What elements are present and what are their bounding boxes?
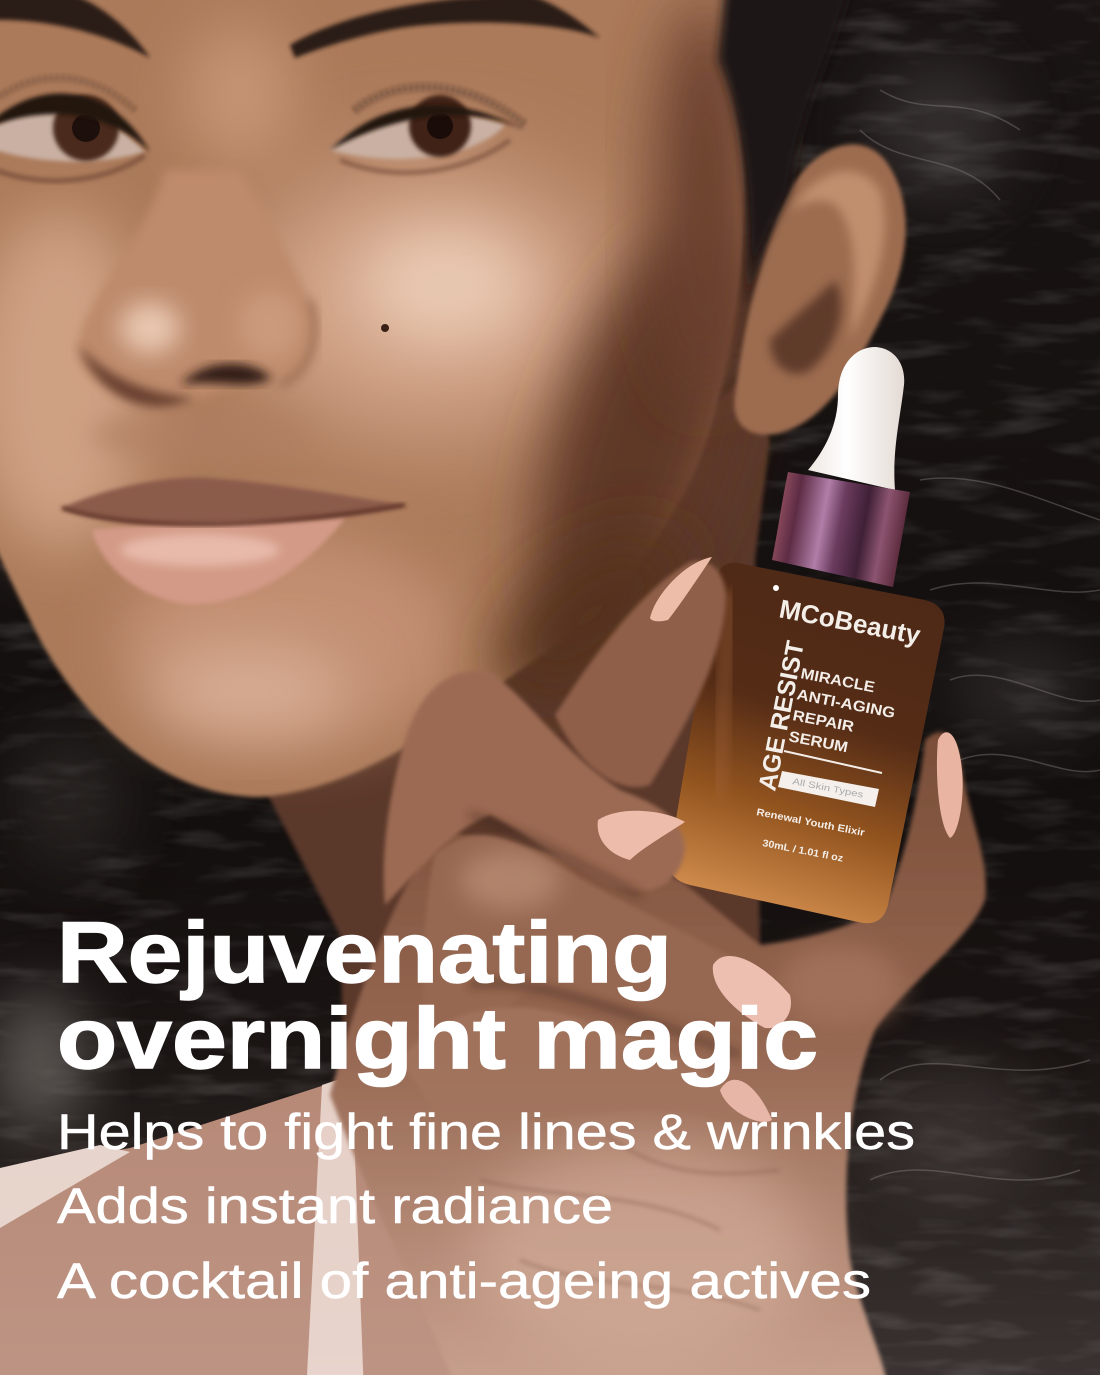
metal collar bbox=[772, 472, 910, 587]
neck bbox=[255, 380, 770, 1100]
benefits list: Adds instant radiance bbox=[57, 1178, 613, 1234]
serum bottle bbox=[669, 563, 945, 923]
eye left bbox=[0, 78, 150, 181]
benefits list: Helps to fight fine lines & wrinkles bbox=[57, 1104, 915, 1160]
nail: index bbox=[598, 811, 685, 860]
lips bbox=[62, 478, 405, 604]
lower wash bbox=[0, 1050, 1100, 1375]
label text on bottle: REPAIR bbox=[791, 707, 856, 736]
fingers bbox=[384, 557, 963, 1128]
benefits list bbox=[57, 1104, 915, 1309]
finger shadows bbox=[470, 815, 740, 1055]
face bbox=[0, 0, 789, 797]
nail: right bbox=[937, 732, 963, 838]
eye right bbox=[330, 87, 525, 173]
upper finger bbox=[555, 561, 726, 787]
benefits list: A cocktail of anti-ageing actives bbox=[57, 1253, 871, 1309]
label text on bottle: All Skin Types bbox=[792, 776, 865, 800]
index finger bbox=[384, 671, 685, 905]
nose bbox=[78, 170, 315, 408]
nail: top bbox=[650, 557, 712, 621]
hair strands at temple bbox=[718, 0, 850, 320]
nail: lower bbox=[713, 956, 791, 1028]
dropper bulb bbox=[808, 347, 904, 490]
nail: bottom bbox=[720, 1080, 772, 1122]
third finger bbox=[423, 835, 791, 1090]
chest and straps bbox=[0, 1075, 480, 1375]
label text on bottle: 30mL / 1.01 fl oz bbox=[761, 838, 844, 865]
hand palm bbox=[330, 732, 986, 1375]
headline bbox=[57, 905, 818, 1087]
headline: overnight magic bbox=[57, 991, 818, 1087]
label text on bottle: SERUM bbox=[787, 728, 849, 756]
label text on bottle: MIRACLE bbox=[799, 665, 876, 696]
label text on bottle: AGE RESIST bbox=[753, 639, 810, 793]
ear bbox=[734, 144, 906, 435]
headline: Rejuvenating bbox=[57, 905, 672, 1001]
mole bbox=[381, 324, 389, 332]
label text on bottle: ANTI-AGING bbox=[795, 686, 897, 722]
label text on bottle: Renewal Youth Elixir bbox=[755, 807, 866, 839]
eyebrows bbox=[0, 0, 600, 58]
label text on bottle: MCoBeauty bbox=[777, 593, 923, 650]
label text on bottle bbox=[753, 593, 923, 865]
fourth finger bbox=[400, 1007, 772, 1128]
